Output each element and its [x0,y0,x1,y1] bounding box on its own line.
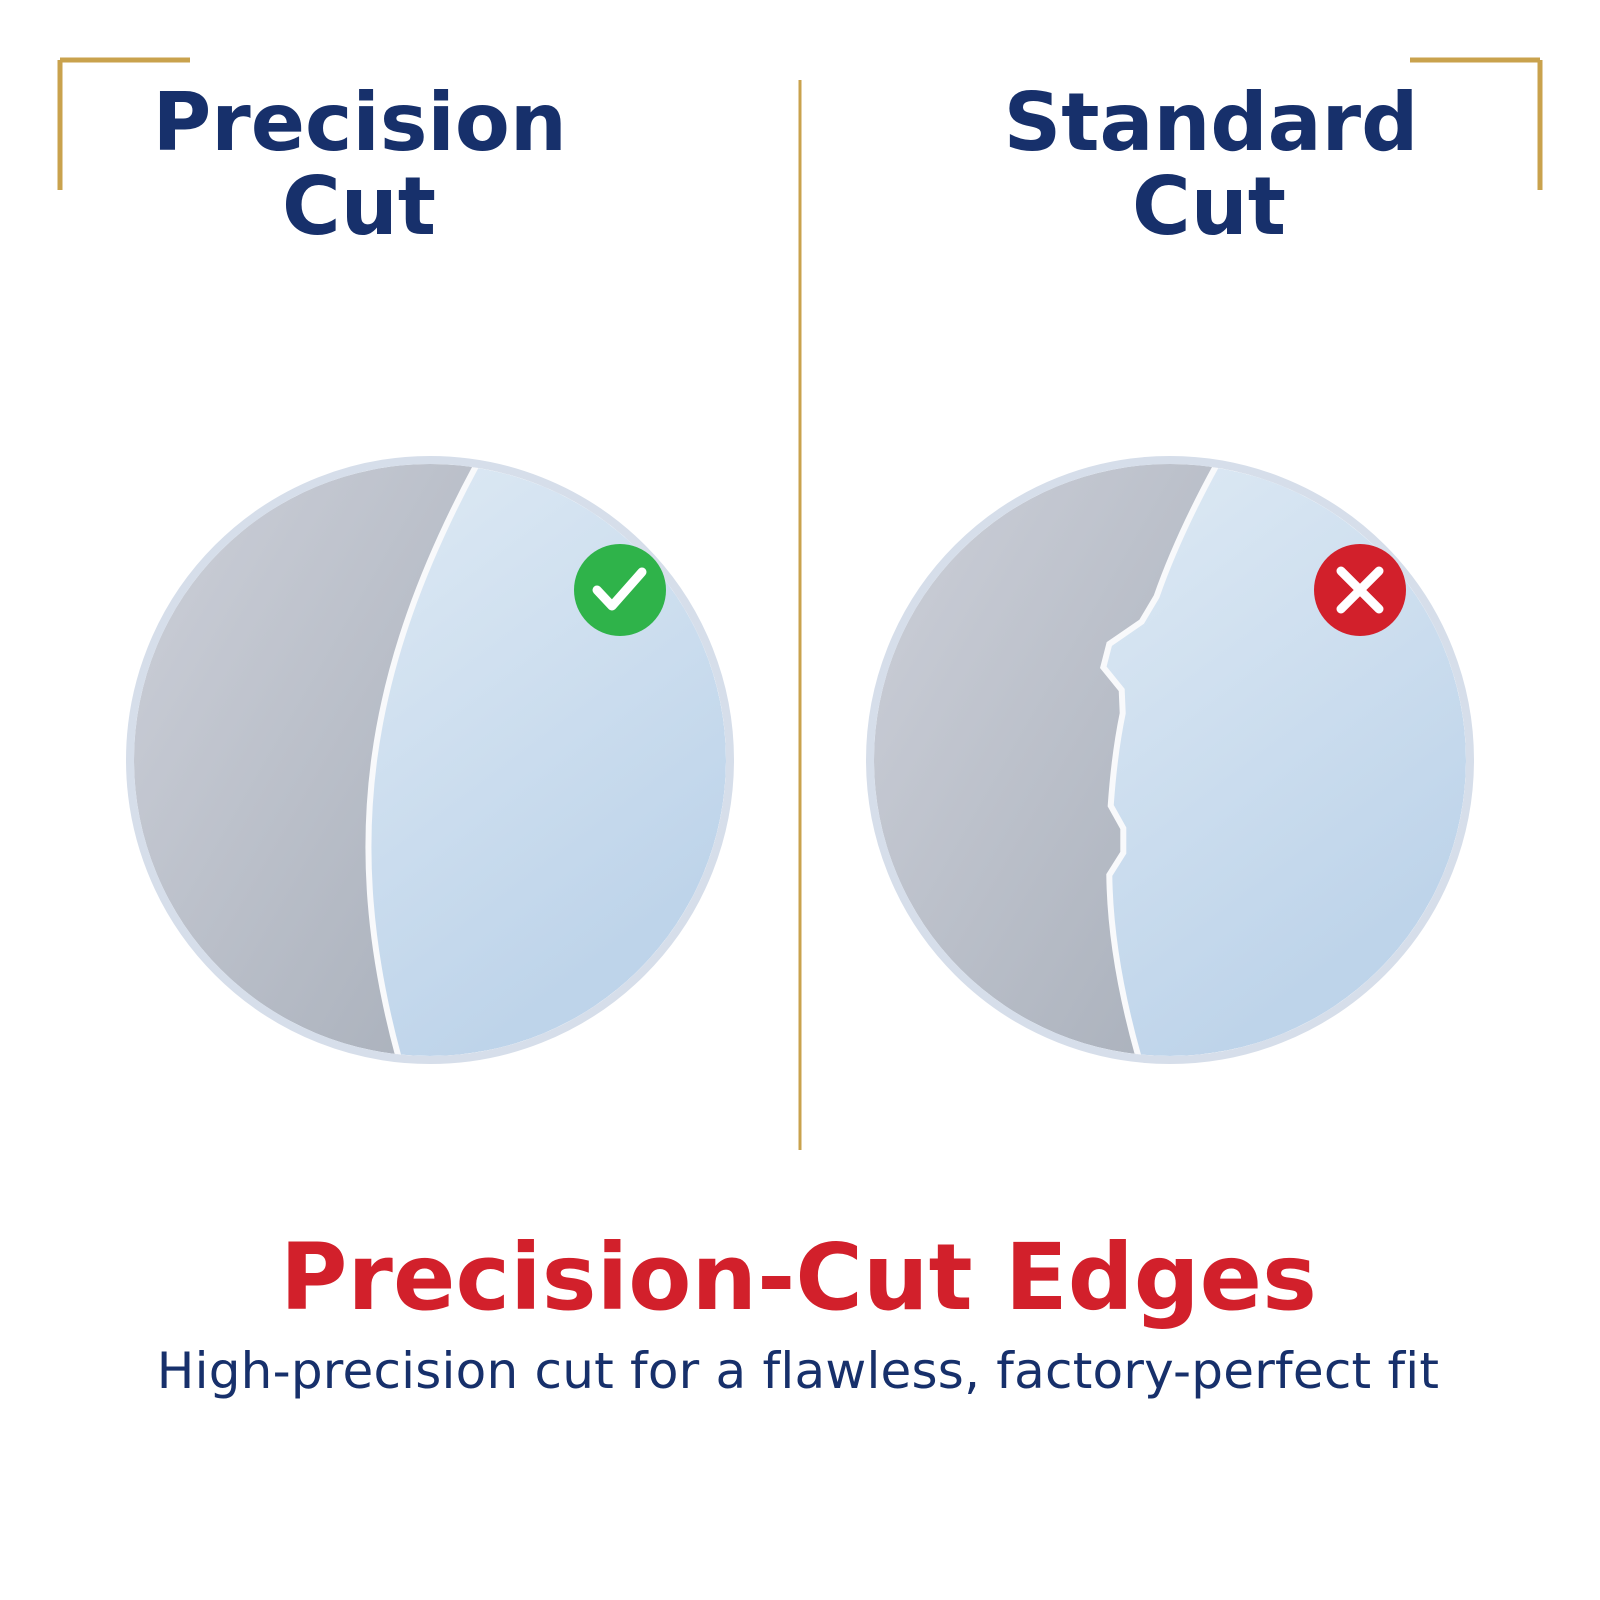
subtitle: High-precision cut for a flawless, factory-perfect fit [157,1342,1439,1400]
lens: standard cut [840,456,1470,1062]
icon: red cross badge [1314,544,1406,636]
corner bracket: top left [60,60,190,190]
heading: Precision Cut: Cut [282,160,436,253]
lens: precision cut [100,456,730,1062]
icon: green check badge [574,544,666,636]
heading: Standard Cut: Standard [1004,76,1418,169]
heading: Precision Cut: Precision [153,76,567,169]
corner bracket: top right [1410,60,1540,190]
center divider [798,80,802,1150]
heading: Standard Cut: Cut [1132,160,1286,253]
title: Precision-Cut Edges [280,1224,1317,1331]
